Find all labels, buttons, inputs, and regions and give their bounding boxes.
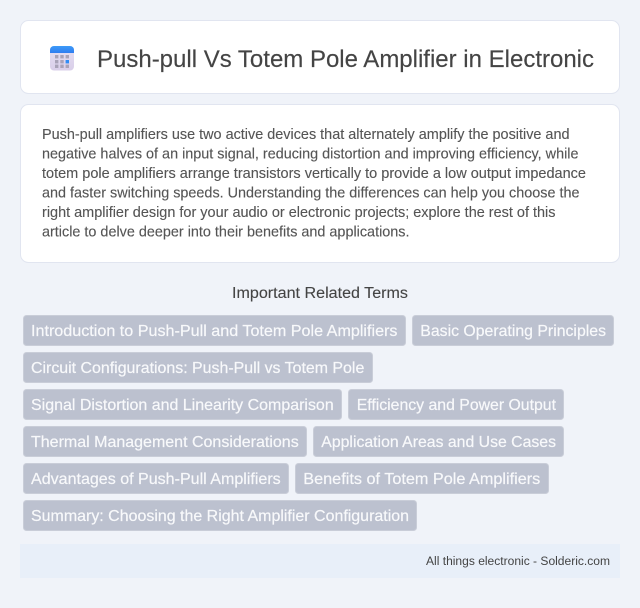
tag: signal distortion: Signal Distortion and Linearity Comparison [31, 397, 334, 414]
text block: summary paragraph: negative halves of an input signal, reducing distortion and improving efficiency, while [42, 146, 579, 162]
title: Push-pull Vs Totem Pole Amplifier in Electronic [97, 46, 594, 73]
heading: important related terms: Important Related Terms [232, 285, 408, 302]
tag: basic operating principles [412, 316, 614, 346]
footer: All things electronic - Solderic.com [426, 554, 610, 568]
footer [20, 544, 620, 578]
text block: summary paragraph [42, 127, 586, 240]
tag: circuit configurations: Circuit Configurations: Push-Pull vs Totem Pole [31, 360, 364, 377]
panel: header card [20, 20, 620, 94]
tag: application areas [314, 426, 564, 456]
tag: thermal management [24, 426, 306, 456]
tag: circuit configurations [24, 352, 372, 382]
tag: benefits: Benefits of Totem Pole Amplifiers [303, 471, 540, 488]
text block: summary paragraph: totem pole amplifiers arrange transistors vertically to provide a low output impedance [42, 166, 586, 182]
text block: summary paragraph: article to delve deeper into their benefits and applications. [42, 224, 410, 240]
tag: advantages [24, 464, 288, 494]
tag list: related terms [24, 316, 614, 530]
tag: advantages: Advantages of Push-Pull Amplifiers [31, 471, 281, 488]
tag: efficiency: Efficiency and Power Output [357, 397, 557, 414]
tag: application areas: Application Areas and Use Cases [321, 434, 556, 451]
tag: efficiency [348, 390, 564, 420]
text block: summary paragraph: Push-pull amplifiers use two active devices that alternately amplify the positive and [42, 127, 570, 143]
tag: basic operating principles: Basic Operating Principles [420, 323, 606, 340]
tag: summary: Summary: Choosing the Right Amplifier Configuration [31, 508, 409, 525]
panel: summary card [20, 104, 620, 262]
tag: benefits [296, 464, 548, 494]
tag: thermal management: Thermal Management Considerations [31, 434, 299, 451]
tag: signal distortion [24, 390, 342, 420]
tag: introduction: Introduction to Push-Pull and Totem Pole Amplifiers [31, 323, 398, 340]
tag: summary [24, 500, 416, 530]
icon: calendar [50, 46, 74, 70]
text block: summary paragraph: and faster switching speeds. Understanding the differences can help you choose the [42, 186, 580, 202]
tag: introduction [24, 316, 406, 346]
text block: summary paragraph: right amplifier design for your audio or electronic projects; explore the rest of this [42, 205, 556, 221]
